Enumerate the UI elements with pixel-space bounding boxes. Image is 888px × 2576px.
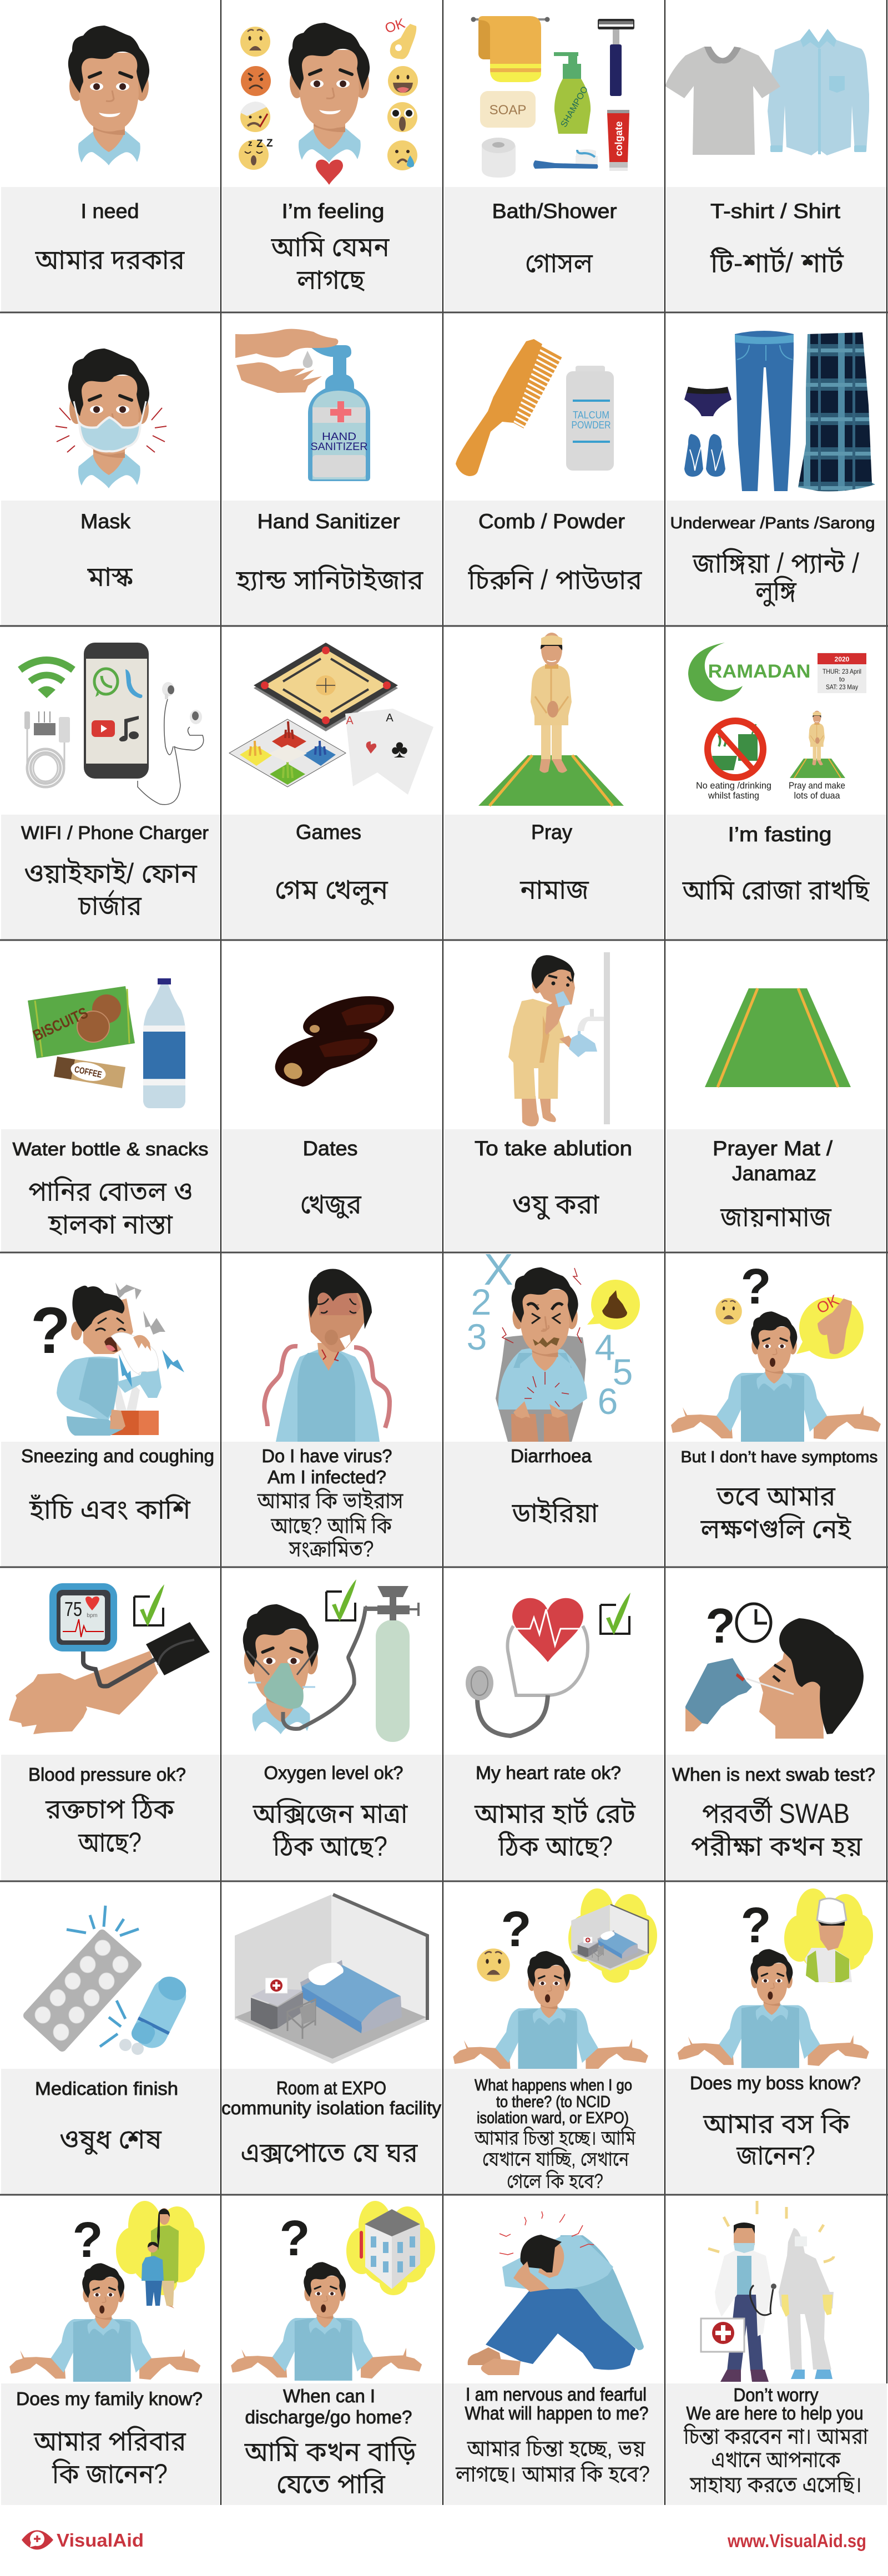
panel: Does my boss know? — [665, 1888, 887, 2195]
icon: biscuits, coffee, water bottle: COFFEE — [73, 1065, 103, 1080]
icon: man with stomach pain on toilet: 2 — [471, 1281, 491, 1322]
English label: I am nervous and fearful — [465, 2384, 648, 2423]
icon: worried man thinking of home: ? — [280, 2211, 310, 2266]
Bengali label: Pray: নামাজ — [519, 874, 589, 905]
icon: hand sanitizer pump bottle: HAND — [322, 431, 356, 443]
icon: man with oxygen mask and tank — [243, 1579, 420, 1742]
Bengali label: Do I have virus?: আমার কি ভাইরাস — [257, 1487, 403, 1513]
icon: worried man thinking of home — [231, 2201, 435, 2381]
icon: worried man imagining isolation room: ? — [501, 1902, 531, 1957]
icon: man with feelings emojis: z — [248, 139, 252, 148]
icon: hand sanitizer pump bottle — [235, 329, 370, 481]
English label: Underwear /Pants /Sarong: Underwear /Pants /Sarong — [670, 514, 875, 532]
Bengali label: When can I discharge/go home?: আমি কখন বাড়ি — [244, 2436, 417, 2467]
English label: Prayer Mat / Janamaz: Janamaz — [732, 1162, 816, 1185]
icon: Ramadan calendar and fasting rules — [688, 643, 866, 801]
English label: Mask: Mask — [80, 510, 131, 533]
English label: I need: I need — [81, 200, 139, 223]
English label: Do I have virus? Am I infected?: Am I infected? — [268, 1467, 386, 1487]
panel: When is next swab test? — [665, 1598, 887, 1881]
panel: Comb / Powder — [445, 339, 665, 626]
Bengali label: Water bottle & snacks — [28, 1176, 193, 1240]
icon: Ramadan calendar and fasting rules: lots of duaa — [794, 790, 840, 801]
Bengali label: Oxygen level ok? — [253, 1798, 408, 1862]
Bengali label: When can I discharge/go home? — [244, 2436, 417, 2499]
Bengali label: Does my family know?: আমার পরিবার — [33, 2426, 186, 2457]
Bengali label: Oxygen level ok?: ঠিক আছে? — [273, 1831, 387, 1862]
English label: Sneezing and coughing: Sneezing and coughing — [21, 1446, 214, 1466]
Bengali label: But I don't have symptoms: তবে আমার — [716, 1481, 836, 1512]
icon: underwear, sandals, jeans, sarong — [684, 331, 875, 492]
Bengali label: WIFI / Phone Charger — [24, 858, 198, 921]
English label: Does my family know?: Does my family know? — [16, 2388, 203, 2409]
English label: Water bottle & snacks: Water bottle & snacks — [12, 1139, 209, 1159]
icon: Ramadan calendar and fasting rules: 2020 — [835, 655, 850, 663]
Bengali label: Bath/Shower: গোসল — [525, 248, 593, 279]
panel: Water bottle & snacks — [1, 978, 221, 1252]
Bengali label: Don't worry: এখানে আপনাকে — [712, 2447, 841, 2472]
icon: man hugging knees in fear — [468, 2211, 644, 2375]
Bengali label: When is next swab test?: পরীক্ষা কখন হয় — [690, 1831, 862, 1862]
English label: My heart rate ok?: My heart rate ok? — [476, 1762, 621, 1783]
icon: shrugging man, no symptoms — [671, 1259, 881, 1442]
icon: man with feelings emojis — [239, 16, 418, 185]
icon: Ramadan calendar and fasting rules: No eating /drinking — [696, 780, 771, 791]
icon: man with stomach pain on toilet: 4 — [595, 1327, 615, 1368]
footer: website address: www.VisualAid.sg — [727, 2530, 866, 2551]
panel: Does my family know? — [1, 2201, 220, 2505]
Bengali label: Don't worry — [683, 2423, 869, 2497]
Bengali label: Diarrhoea: ডাইরিয়া — [512, 1497, 598, 1528]
panel: But I don't have symptoms — [665, 1259, 887, 1567]
icon: man with feelings emojis: OK — [383, 16, 407, 37]
Bengali label: Water bottle & snacks: পানির বোতল ও — [28, 1176, 193, 1207]
Bengali label: I'm fasting: আমি রোজা রাখছি — [682, 875, 870, 906]
icon: doctor and protective suit worker — [701, 2201, 834, 2382]
Bengali label: My heart rate ok?: ঠিক আছে? — [498, 1831, 613, 1862]
Bengali label: When can I discharge/go home?: যেতে পারি — [276, 2468, 386, 2499]
icon: man sneezing into tissue: ? — [31, 1294, 70, 1367]
panel: Bath/Shower — [445, 16, 665, 312]
Bengali label: Underwear /Pants /Sarong — [692, 548, 859, 607]
Bengali label: I am nervous and fearful: আমার চিন্তা হচ্ছে, ভয় — [467, 2435, 646, 2461]
icon: Ramadan calendar and fasting rules: RAMADAN — [708, 661, 810, 682]
icon: nose swab test with clock — [685, 1598, 864, 1739]
icon: worried man thinking of family: ? — [73, 2213, 103, 2268]
icon: Ramadan calendar and fasting rules: Pray and make — [789, 780, 845, 791]
icon: man with stomach pain on toilet: 5 — [613, 1351, 633, 1392]
icon: wifi, phone, charger, earphones — [20, 643, 204, 805]
panel: Dates — [222, 988, 442, 1252]
English label: Games: Games — [296, 821, 361, 843]
icon: bathroom toiletries: SHAMPOO — [559, 85, 590, 129]
Bengali label: I need: আমার দরকার — [35, 244, 185, 275]
Bengali label: Do I have virus? — [257, 1487, 403, 1562]
icon: T-shirt and shirt — [665, 29, 869, 155]
English label: What happens when I go to there?: What happens when I go — [475, 2077, 632, 2094]
icon: Ramadan calendar and fasting rules: to — [839, 675, 845, 683]
English label: Room at EXPO community isolation facility: Room at EXPO — [276, 2078, 386, 2098]
panel: I need — [0, 0, 221, 312]
panel: What happens when I go to there? — [443, 1888, 664, 2195]
English label: What happens when I go to there? — [475, 2077, 632, 2127]
English label: When is next swab test?: When is next swab test? — [672, 1764, 875, 1785]
panel: Oxygen level ok? — [221, 1579, 442, 1881]
Bengali label: WIFI / Phone Charger: ওয়াইফাই/ ফোন — [24, 858, 198, 889]
icon: man with feelings emojis: Z — [256, 138, 263, 150]
Bengali label: Room at EXPO: এক্সপোতে যে ঘর — [241, 2137, 418, 2168]
icon: shrugging man, no symptoms: ? — [741, 1259, 771, 1315]
English label: Medication finish: Medication finish — [35, 2078, 178, 2099]
footer: VisualAid logo — [22, 2530, 144, 2550]
icon: biscuits, coffee, water bottle — [28, 978, 185, 1108]
panel: Diarrhoea — [443, 1245, 664, 1567]
Bengali label: Don't worry: সাহায্য করতে এসেছি। — [689, 2471, 862, 2497]
icon: man on prayer mat — [478, 633, 624, 806]
icon: carrom, ludo, playing cards: A — [346, 715, 354, 727]
icon: carrom, ludo, playing cards — [229, 643, 433, 795]
Bengali label: T-shirt / Shirt: টি-শার্ট/ শার্ট — [710, 246, 844, 279]
icon: Ramadan calendar and fasting rules: whilst fasting — [708, 790, 759, 801]
icon: man wearing mask — [56, 348, 167, 488]
icon: shrugging man, no symptoms: OK — [814, 1291, 842, 1317]
Bengali label: Does my boss know? — [703, 2108, 850, 2171]
English label: Don't worry: Don’t worry — [734, 2385, 819, 2405]
Bengali label: Medication finish: ওষুধ শেষ — [59, 2124, 162, 2155]
Bengali label: My heart rate ok?: আমার হার্ট রেট — [474, 1796, 636, 1829]
icon: worried man thinking of family — [9, 2201, 205, 2382]
English label: I'm feeling: I’m feeling — [282, 200, 384, 223]
Bengali label: Hand Sanitizer: হ্যান্ড সানিটাইজার — [236, 564, 424, 595]
icon: man with stomach pain on toilet: 3 — [467, 1316, 487, 1357]
Bengali label: Dates: খেজুর — [300, 1189, 362, 1220]
icon: blood pressure monitor and arm: 75 — [64, 1598, 82, 1620]
Bengali label: Underwear /Pants /Sarong: জাঙ্গিয়া / প্যান্ট / — [692, 548, 859, 579]
Bengali label: WIFI / Phone Charger: চার্জার — [78, 890, 142, 921]
English label: T-shirt / Shirt: T-shirt / Shirt — [710, 200, 841, 223]
English label: Don't worry — [686, 2385, 864, 2423]
panel: Do I have virus? — [221, 1269, 442, 1567]
Bengali label: Comb / Powder: চিরুনি / পাউডার — [468, 564, 643, 595]
English label: WIFI / Phone Charger: WIFI / Phone Charger — [21, 822, 209, 843]
Bengali label: Do I have virus?: আছে? আমি কি — [270, 1512, 392, 1538]
Bengali label: Blood pressure ok? — [45, 1794, 175, 1858]
Bengali label: Underwear /Pants /Sarong: লুঙ্গি — [755, 575, 796, 607]
icon: Ramadan calendar and fasting rules: SAT: 23 May — [826, 683, 858, 691]
icon: green prayer mat — [705, 988, 851, 1087]
Bengali label: Does my boss know?: আমার বস কি — [703, 2108, 850, 2139]
panel: Prayer Mat / Janamaz — [667, 988, 887, 1252]
icon: comb and talcum powder: POWDER — [572, 420, 611, 431]
English label: When can I discharge/go home?: discharge/go home? — [245, 2407, 412, 2427]
English label: Comb / Powder: Comb / Powder — [478, 510, 625, 533]
icon: biscuits, coffee, water bottle: BISCUITS — [31, 1004, 90, 1044]
panel: Don't worry — [665, 2201, 887, 2505]
icon: worried man imagining isolation room — [453, 1888, 657, 2072]
icon: comb and talcum powder: TALCUM — [573, 410, 609, 421]
Bengali label: I'm feeling: লাগছে — [296, 264, 365, 295]
English label: What happens when I go to there?: to there? (to NCID — [496, 2093, 610, 2111]
English label: To take ablution: To take ablution — [475, 1137, 632, 1160]
panel: WIFI / Phone Charger — [1, 643, 221, 940]
Bengali label: But I don't have symptoms: লক্ষণগুলি নেই — [700, 1513, 852, 1544]
English label: What happens when I go to there?: isolation ward, or EXPO) — [477, 2109, 629, 2127]
Bengali label: Blood pressure ok?: রক্তচাপ ঠিক — [45, 1794, 175, 1825]
icon: Ramadan calendar and fasting rules: THUR: 23 April — [823, 668, 861, 675]
Bengali label: Water bottle & snacks: হালকা নাস্তা — [48, 1209, 173, 1240]
English label: Diarrhoea: Diarrhoea — [511, 1446, 592, 1466]
panel: Medication finish — [1, 1906, 220, 2195]
Bengali label: Sneezing and coughing: হাঁচি এবং কাশি — [29, 1494, 191, 1525]
English label: But I don't have symptoms: But I don’t have symptoms — [680, 1448, 878, 1466]
English label: Do I have virus? Am I infected? — [262, 1446, 392, 1487]
Bengali label: My heart rate ok? — [474, 1796, 636, 1862]
panel: Games — [222, 643, 442, 940]
Bengali label: Do I have virus?: সংক্রামিত? — [289, 1536, 374, 1562]
icon: man with stomach pain on toilet: X — [483, 1245, 513, 1294]
Bengali label: I am nervous and fearful — [455, 2435, 650, 2487]
Bengali label: I'm feeling — [271, 231, 390, 295]
icon: carrom, ludo, playing cards: ♣ — [391, 734, 408, 763]
icon: stethoscope and heart — [466, 1593, 630, 1736]
icon: man with stomach pain on toilet — [467, 1245, 640, 1442]
icon: man with stomach pain on toilet: 6 — [598, 1381, 618, 1422]
English label: I am nervous and fearful: I am nervous and fearful — [466, 2384, 647, 2405]
panel: T-shirt / Shirt — [665, 29, 887, 312]
icon: smiling man — [68, 26, 149, 165]
icon: isolation room — [235, 1895, 427, 2064]
icon: blood pressure monitor and arm — [9, 1583, 210, 1734]
Bengali label: Prayer Mat: জায়নামাজ — [720, 1201, 832, 1233]
panel: Blood pressure ok? — [1, 1583, 220, 1881]
panel: Room at EXPO — [221, 1895, 442, 2195]
icon: dates fruit — [275, 988, 398, 1087]
English label: When can I discharge/go home?: When can I — [283, 2386, 375, 2406]
panel: Mask — [1, 348, 221, 626]
icon: hand sanitizer pump bottle: SANITIZER — [311, 441, 367, 453]
English label: Oxygen level ok?: Oxygen level ok? — [264, 1762, 403, 1783]
panel: Pray — [445, 633, 665, 940]
Bengali label: I am nervous and fearful: লাগছে। আমার কি হবে? — [455, 2461, 650, 2487]
icon: bathroom toiletries: colgate — [613, 121, 624, 156]
panel: I'm feeling — [222, 16, 442, 312]
English label: Prayer Mat / Janamaz — [713, 1137, 833, 1185]
Bengali label: Mask: মাস্ক — [87, 561, 133, 592]
icon: nose swab test with clock: ? — [705, 1598, 735, 1653]
panel: Sneezing and coughing — [1, 1282, 220, 1567]
English label: Bath/Shower: Bath/Shower — [492, 200, 617, 223]
icon: bathroom toiletries — [471, 16, 634, 178]
icon: man sneezing into tissue — [31, 1282, 184, 1436]
panel: My heart rate ok? — [443, 1593, 664, 1881]
Bengali label: When is next swab test? — [690, 1796, 862, 1862]
icon: comb and talcum powder — [456, 339, 614, 476]
footer: VisualAid logo: VisualAid — [57, 2530, 144, 2550]
panel: Underwear /Pants /Sarong — [667, 331, 887, 626]
English label: Room at EXPO community isolation facility: community isolation facility — [221, 2098, 442, 2118]
Bengali label: I'm feeling: আমি যেমন — [271, 231, 390, 262]
Bengali label: What happens when I go to there?: আমার চিন্তা হচ্ছে। আমি — [474, 2126, 636, 2149]
English label: Blood pressure ok?: Blood pressure ok? — [28, 1764, 186, 1785]
panel: To take ablution — [445, 952, 665, 1252]
Bengali label: Does my family know? — [33, 2426, 186, 2489]
panel: Hand Sanitizer — [222, 329, 442, 626]
Bengali label: Games: গেম খেলুন — [275, 874, 389, 906]
English label: Room at EXPO community isolation facility — [221, 2078, 442, 2118]
English label: I'm fasting: I’m fasting — [728, 823, 831, 846]
Bengali label: Oxygen level ok?: অক্সিজেন মাত্রা — [253, 1798, 408, 1829]
English label: Hand Sanitizer: Hand Sanitizer — [258, 510, 400, 533]
Bengali label: What happens when I go to there? — [474, 2126, 636, 2193]
English label: Prayer Mat / Janamaz: Prayer Mat / — [713, 1137, 833, 1160]
English label: Pray: Pray — [531, 821, 572, 843]
Bengali label: When is next swab test?: পরবর্তী SWAB — [702, 1796, 850, 1829]
Bengali label: Does my family know?: কি জানেন? — [52, 2458, 168, 2489]
icon: pill blister pack and bottle — [28, 1906, 193, 2055]
English label: I am nervous and fearful: What will happen to me? — [465, 2403, 648, 2423]
Bengali label: What happens when I go to there?: যেখানে যাচ্ছি, সেখানে — [482, 2147, 629, 2170]
panel: When can I discharge/go home? — [221, 2201, 442, 2505]
Bengali label: To take ablution: ওযু করা — [512, 1189, 599, 1220]
icon: man washing at tap — [508, 952, 610, 1127]
English label: Do I have virus? Am I infected?: Do I have virus? — [262, 1446, 392, 1466]
icon: man with feelings emojis: Z — [266, 138, 273, 149]
panel: I am nervous and fearful — [443, 2211, 664, 2505]
Bengali label: Blood pressure ok?: আছে? — [78, 1827, 142, 1858]
icon: bathroom toiletries: SOAP — [490, 103, 526, 118]
English label: When can I discharge/go home? — [245, 2386, 412, 2427]
icon: carrom, ludo, playing cards: A — [386, 712, 393, 724]
panel: I'm fasting — [667, 643, 887, 940]
icon: feverish man with sore throat — [264, 1269, 390, 1442]
icon: blood pressure monitor and arm: bpm — [87, 1613, 98, 1619]
icon: worried man thinking of boss: ? — [741, 1898, 771, 1953]
Bengali label: But I don't have symptoms — [700, 1481, 852, 1544]
Bengali label: What happens when I go to there?: গেলে কি হবে? — [507, 2169, 603, 2193]
English label: Don't worry: We are here to help you — [686, 2403, 864, 2423]
English label: Dates: Dates — [303, 1137, 357, 1160]
icon: worried man thinking of boss — [678, 1888, 873, 2068]
Bengali label: Does my boss know?: জানেন? — [736, 2140, 815, 2171]
English label: Does my boss know?: Does my boss know? — [690, 2073, 861, 2093]
